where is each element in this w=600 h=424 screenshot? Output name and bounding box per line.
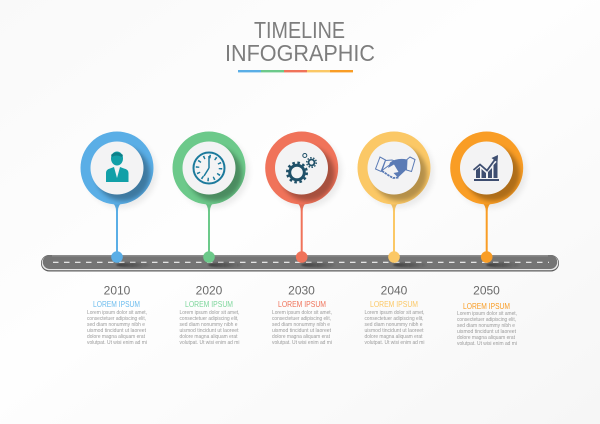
year 2020: 2020 [196, 284, 223, 298]
title underline [238, 70, 353, 72]
description 2040 [364, 300, 424, 346]
description 2050: Lorem ipsum dolor sit amet, [457, 311, 517, 317]
description 2030: sed diam nonummy nibh e [272, 322, 330, 328]
description 2050: sed diam nonummy nibh e [457, 323, 515, 329]
description 2010: LOREM IPSUM [93, 300, 140, 309]
icon: gears [287, 154, 316, 182]
description 2020: sed diam nonummy nibh e [180, 322, 238, 328]
disc shadow [188, 147, 242, 201]
disc shadow [373, 147, 427, 201]
description 2040: Lorem ipsum dolor sit amet, [364, 310, 424, 316]
ring [450, 132, 523, 204]
description 2050: consectetuer adipiscing elit, [457, 317, 516, 323]
milestone 2050 [450, 132, 527, 347]
description 2010: uismod tincidunt ut laoreet [87, 328, 146, 334]
description 2050: dolore magna aliquam erat [457, 335, 515, 341]
ring [172, 132, 246, 204]
icon: businessman [106, 152, 128, 182]
description 2040: uismod tincidunt ut laoreet [364, 328, 424, 334]
description 2010: dolore magna aliquam erat [87, 334, 145, 340]
icon: growth chart [474, 155, 499, 181]
description 2020: volutpat. Ut wisi enim ad mi [180, 340, 240, 346]
ring outer shadow [270, 136, 342, 208]
white disc [275, 142, 328, 194]
description 2010: consectetuer adipiscing elit, [87, 316, 146, 322]
milestone 2030 [265, 132, 342, 346]
description 2050: LOREM IPSUM [463, 302, 510, 311]
description 2020: dolore magna aliquam erat [180, 334, 238, 340]
description 2030 [272, 300, 332, 346]
description 2020: uismod tincidunt ut laoreet [180, 328, 239, 334]
title: INFOGRAPHIC [225, 40, 375, 66]
description 2030: LOREM IPSUM [278, 300, 326, 309]
title: TIMELINE [254, 17, 345, 43]
description 2010: sed diam nonummy nibh e [87, 322, 145, 328]
marker stem and dot [481, 203, 522, 267]
milestone 2020 [172, 132, 249, 346]
ring [265, 132, 338, 204]
description 2020 [180, 300, 240, 346]
ring outer shadow [455, 136, 527, 208]
ring outer shadow [85, 136, 157, 208]
description 2020: consectetuer adipiscing elit, [180, 316, 238, 322]
description 2050 [457, 302, 517, 347]
description 2040: volutpat. Ut wisi enim ad mi [364, 340, 424, 346]
ring [358, 132, 430, 204]
year 2040: 2040 [381, 284, 408, 298]
description 2050: uismod tincidunt ut laoreet [457, 329, 516, 335]
white disc [182, 142, 236, 194]
description 2030: Lorem ipsum dolor sit amet, [272, 310, 332, 316]
description 2020: Lorem ipsum dolor sit amet, [180, 310, 240, 316]
description 2050: volutpat. Ut wisi enim ad mi [457, 341, 517, 347]
description 2040: dolore magna aliquam erat [364, 334, 423, 340]
marker stem and dot [203, 203, 244, 267]
disc shadow [96, 147, 150, 201]
disc shadow [281, 147, 335, 201]
ring outer shadow [177, 136, 249, 208]
year 2010: 2010 [104, 284, 131, 298]
description 2040: LOREM IPSUM [370, 300, 418, 309]
milestone 2040 [358, 132, 434, 346]
description 2030: uismod tincidunt ut laoreet [272, 328, 331, 334]
marker stem and dot [111, 203, 152, 267]
description 2010 [87, 300, 147, 346]
description 2040: sed diam nonummy nibh e [364, 322, 423, 328]
description 2010: volutpat. Ut wisi enim ad mi [87, 340, 147, 346]
description 2030: dolore magna aliquam erat [272, 334, 330, 340]
white disc [368, 142, 420, 194]
disc shadow [466, 147, 520, 201]
white disc [460, 142, 513, 194]
description 2030: volutpat. Ut wisi enim ad mi [272, 340, 332, 346]
year 2050: 2050 [473, 284, 500, 298]
year 2030: 2030 [288, 284, 315, 298]
title [225, 17, 375, 66]
road [41, 255, 559, 272]
icon: handshake [376, 157, 415, 178]
description 2020: LOREM IPSUM [185, 300, 233, 309]
description 2040: consectetuer adipiscing elit, [364, 316, 424, 322]
icon: clock [194, 152, 224, 184]
marker stem and dot [388, 203, 429, 267]
white disc [90, 142, 144, 194]
ring [80, 132, 154, 204]
marker stem and dot [296, 203, 337, 267]
description 2030: consectetuer adipiscing elit, [272, 316, 331, 322]
description 2010: Lorem ipsum dolor sit amet, [87, 310, 147, 316]
ring outer shadow [362, 136, 434, 208]
milestone 2010 [80, 132, 157, 346]
